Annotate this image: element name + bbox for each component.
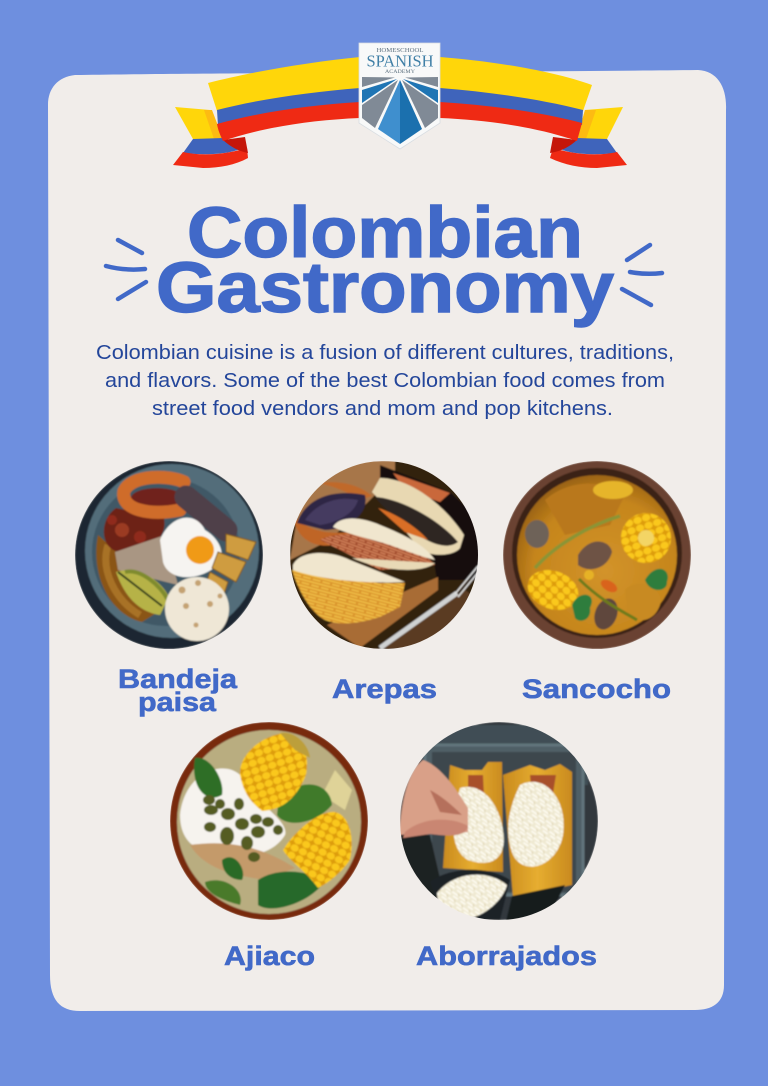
photo: bandeja paisa xyxy=(75,461,263,649)
label: Bandeja paisa: Bandeja xyxy=(118,664,238,694)
photo: ajiaco xyxy=(170,722,368,920)
intro text xyxy=(96,342,674,420)
logo shield: Homeschool Spanish Academy: SPANISH xyxy=(366,52,434,70)
ribbon tail: right xyxy=(550,107,627,168)
label: Bandeja paisa: paisa xyxy=(138,687,217,717)
label: Aborrajados: Aborrajados xyxy=(416,941,597,971)
intro text: and flavors. Some of the best Colombian food comes from xyxy=(105,370,665,392)
logo shield: Homeschool Spanish Academy: ACADEMY xyxy=(385,69,415,75)
logo shield: Homeschool Spanish Academy: HOMESCHOOL xyxy=(376,47,424,54)
label: Sancocho: Sancocho xyxy=(522,674,671,704)
title: Colombian xyxy=(187,194,583,273)
intro text: Colombian cuisine is a fusion of different cultures, traditions, xyxy=(96,342,674,364)
flag ribbon banner xyxy=(173,57,627,168)
label: Bandeja paisa xyxy=(118,664,238,717)
photo: arepas xyxy=(290,461,480,650)
intro text: street food vendors and mom and pop kitchens. xyxy=(152,398,613,420)
icon: right title sparks xyxy=(622,245,662,305)
main cream panel xyxy=(48,70,726,1011)
ribbon tail: left xyxy=(173,107,248,168)
icon: left title sparks xyxy=(106,240,146,299)
photo: aborrajados xyxy=(400,722,598,925)
photo: sancocho xyxy=(503,461,691,649)
label: Arepas: Arepas xyxy=(332,674,437,704)
title: Gastronomy xyxy=(156,249,615,328)
title xyxy=(156,194,615,328)
logo shield: Homeschool Spanish Academy xyxy=(359,43,440,149)
label: Ajiaco: Ajiaco xyxy=(224,941,315,971)
